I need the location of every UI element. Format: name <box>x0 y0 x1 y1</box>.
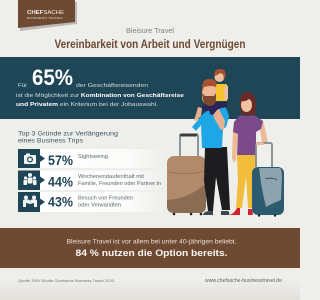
text: 65 percent statement <box>16 65 185 108</box>
row: weekend stay: 44% <box>48 174 73 190</box>
icon: camera <box>24 154 36 164</box>
heading: top 3 reasons: eines Business Trips <box>18 138 84 144</box>
arms <box>232 130 238 163</box>
panel: brown band <box>0 228 300 268</box>
row: sightseeing: 57% <box>48 153 73 168</box>
text: 65 percent statement: der Geschäftsreisenden <box>76 83 148 89</box>
man arms <box>194 107 202 121</box>
child head <box>214 72 224 82</box>
row: visiting friends <box>18 192 165 212</box>
logo <box>18 0 77 31</box>
heading: top 3 reasons: Top 3 Gründe zur Verlängerung <box>18 130 118 138</box>
title: Vereinbarkeit von Arbeit und Vergnügen <box>54 37 246 51</box>
illustration: teal suitcase <box>252 142 284 217</box>
man head <box>202 84 216 104</box>
row: visiting friends: 43% <box>48 194 73 210</box>
text: band highlight: 84 % nutzen die Option bereits. <box>76 248 228 259</box>
row: visiting friends: oder Verwandten <box>78 202 121 208</box>
row: weekend stay: Wochenendaufenthalt mit <box>78 174 145 180</box>
top <box>233 115 263 155</box>
heading: top 3 reasons <box>18 130 118 144</box>
child shirt and legs <box>215 84 228 101</box>
row: visiting friends: Besuch von Freunden <box>78 196 133 202</box>
text: 65 percent statement: und Privatem ein Kriterium bei der Jobauswahl. <box>16 102 158 108</box>
text: 65 percent statement: Für <box>18 83 27 89</box>
man legs <box>204 147 230 211</box>
row: weekend stay <box>18 170 165 190</box>
logo: CHEF SACHE <box>27 10 64 16</box>
icon: friends <box>23 196 37 207</box>
man shirt <box>192 105 229 148</box>
text: band line: Bleisure Travel ist vor allem bei unter 40-jährigen beliebt. <box>66 240 237 246</box>
trousers <box>236 155 256 208</box>
illustration: woman <box>229 92 268 215</box>
logo: BUSINESS TRAVEL <box>27 16 63 20</box>
panel: teal band <box>0 57 300 119</box>
face <box>241 98 252 112</box>
text: 65 percent statement: ist die Möglichkeit zur Kombination von Geschäftsreise <box>16 93 185 99</box>
icon: family <box>24 173 36 185</box>
row: sightseeing: Sightseeing <box>78 154 108 160</box>
row: sightseeing <box>18 149 165 168</box>
text: 65 percent statement: 65% <box>32 65 73 90</box>
row: weekend stay: Familie, Freunden oder Partner:in <box>78 181 161 187</box>
website: www.chefsache-businesstravel.de <box>204 278 282 284</box>
subtitle: Bleisure Travel <box>126 28 174 35</box>
illustration: brown suitcase <box>167 134 206 215</box>
source note: Quelle: DRV-Studie Chefsache Business Travel 2020. <box>18 279 115 283</box>
heels <box>229 208 240 215</box>
hair <box>240 92 256 115</box>
illustration: man with child on shoulders <box>192 69 230 215</box>
